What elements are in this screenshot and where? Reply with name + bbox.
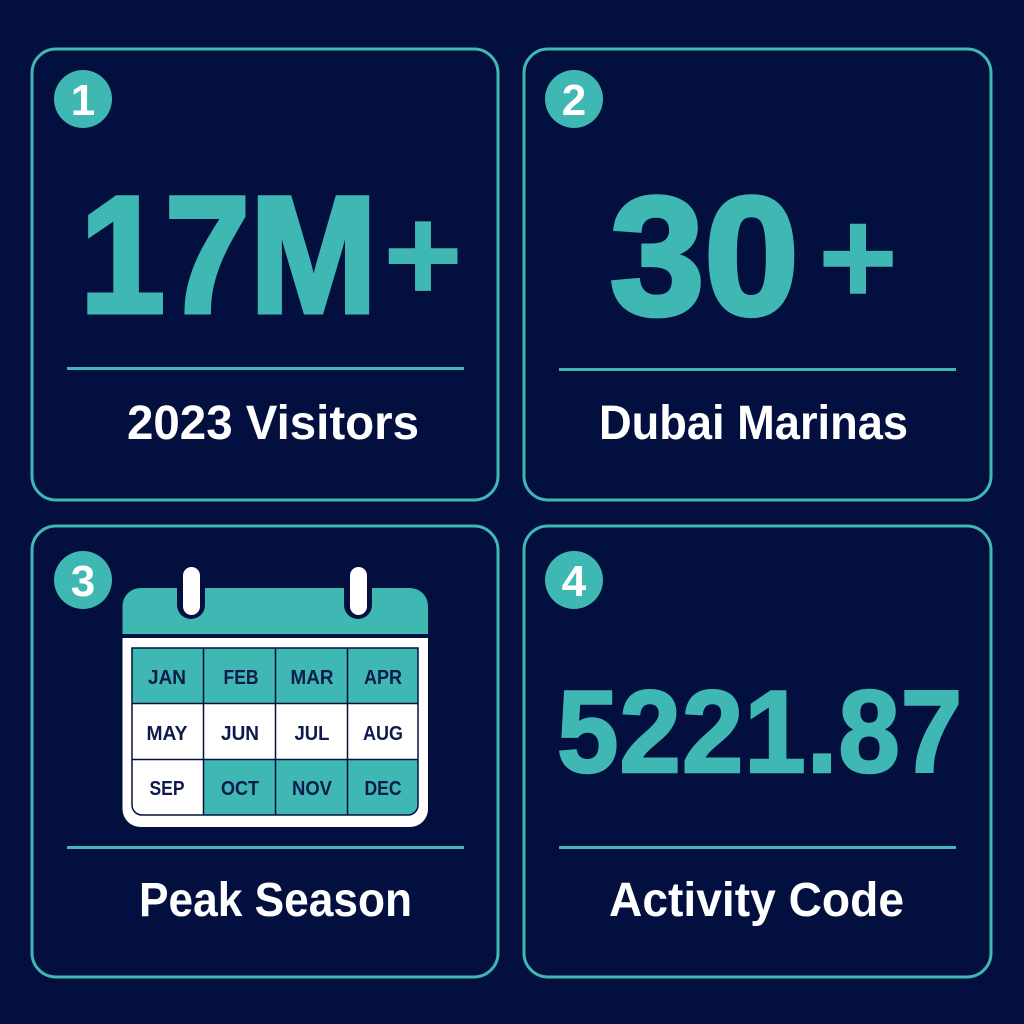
badge 1: 1	[71, 76, 95, 125]
badge 2	[545, 70, 603, 128]
month labels: MAY	[146, 723, 188, 745]
badge 3	[54, 551, 112, 609]
month labels: MAR	[290, 667, 334, 689]
month labels: OCT	[221, 778, 259, 800]
label: Peak Season: Peak Season	[139, 874, 412, 927]
month labels: AUG	[363, 723, 403, 745]
big number 5221.87: 5221.87	[557, 667, 963, 798]
badge 1	[54, 70, 112, 128]
big number 30+: 30	[610, 162, 799, 350]
month labels: SEP	[150, 778, 184, 800]
month labels: JUN	[221, 723, 259, 745]
badge 4: 4	[562, 557, 587, 606]
panel: activity code	[524, 526, 991, 977]
month labels: NOV	[292, 778, 333, 800]
badge 2: 2	[562, 76, 586, 125]
month labels: JUL	[294, 723, 330, 745]
badge 3: 3	[71, 557, 95, 606]
big number 30+	[610, 162, 898, 350]
month labels: DEC	[364, 778, 402, 800]
label: Activity Code: Activity Code	[609, 874, 904, 927]
month labels: APR	[364, 667, 402, 689]
label: Dubai Marinas: Dubai Marinas	[599, 397, 908, 450]
month labels: FEB	[224, 667, 258, 689]
month labels: JAN	[148, 667, 186, 689]
badge 4	[545, 551, 603, 609]
panel: 2023 visitors	[32, 49, 498, 500]
panel: Dubai marinas	[524, 49, 991, 500]
big number 17M+: +	[384, 179, 462, 330]
big number 17M+: 17M	[80, 162, 377, 347]
calendar icon	[122, 567, 428, 827]
month labels	[146, 667, 403, 800]
big number 30+: +	[818, 181, 898, 333]
label: 2023 Visitors: 2023 Visitors	[127, 397, 419, 450]
panel: peak season	[32, 526, 498, 977]
